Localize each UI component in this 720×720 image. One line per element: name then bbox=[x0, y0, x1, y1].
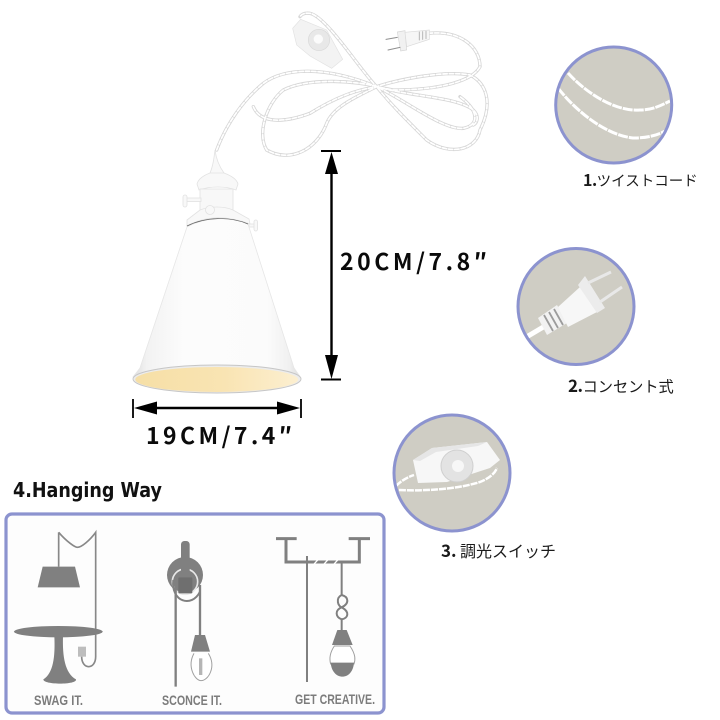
height label: 20CM/7.8″ bbox=[340, 243, 487, 277]
label 3: 3. bbox=[441, 537, 457, 562]
sconce caption: SCONCE IT. bbox=[162, 692, 222, 708]
sconce illustration bbox=[167, 541, 212, 687]
circle detail 3: dimmer switch bbox=[394, 415, 510, 531]
width label: 19CM/7.4″ bbox=[146, 417, 292, 451]
label 3: 調光スイッチ bbox=[460, 538, 556, 562]
creative illustration bbox=[276, 539, 370, 682]
circle detail 2: plug bbox=[518, 248, 634, 364]
pendant lamp bbox=[133, 150, 301, 393]
plug on cord bbox=[386, 30, 429, 51]
shade rim and warm interior bbox=[133, 365, 301, 393]
width dimension arrow bbox=[133, 399, 301, 418]
panel: hanging ways bbox=[6, 514, 384, 713]
label 1: 1.ツイストコード bbox=[583, 167, 698, 191]
lamp shade bbox=[133, 219, 301, 388]
lamp socket bbox=[183, 150, 258, 231]
creative caption: GET CREATIVE. bbox=[295, 691, 375, 707]
twisted cord bundle with dimmer and plug bbox=[217, 13, 487, 155]
swag caption: SWAG IT. bbox=[34, 692, 83, 708]
height dimension arrow bbox=[321, 151, 341, 380]
swag illustration bbox=[14, 532, 103, 684]
circle detail 1: twisted cord bbox=[556, 47, 672, 163]
section heading: 4.Hanging Way bbox=[13, 478, 162, 502]
label 2: 2.コンセント式 bbox=[568, 372, 674, 397]
dimmer switch on cord bbox=[293, 19, 343, 68]
